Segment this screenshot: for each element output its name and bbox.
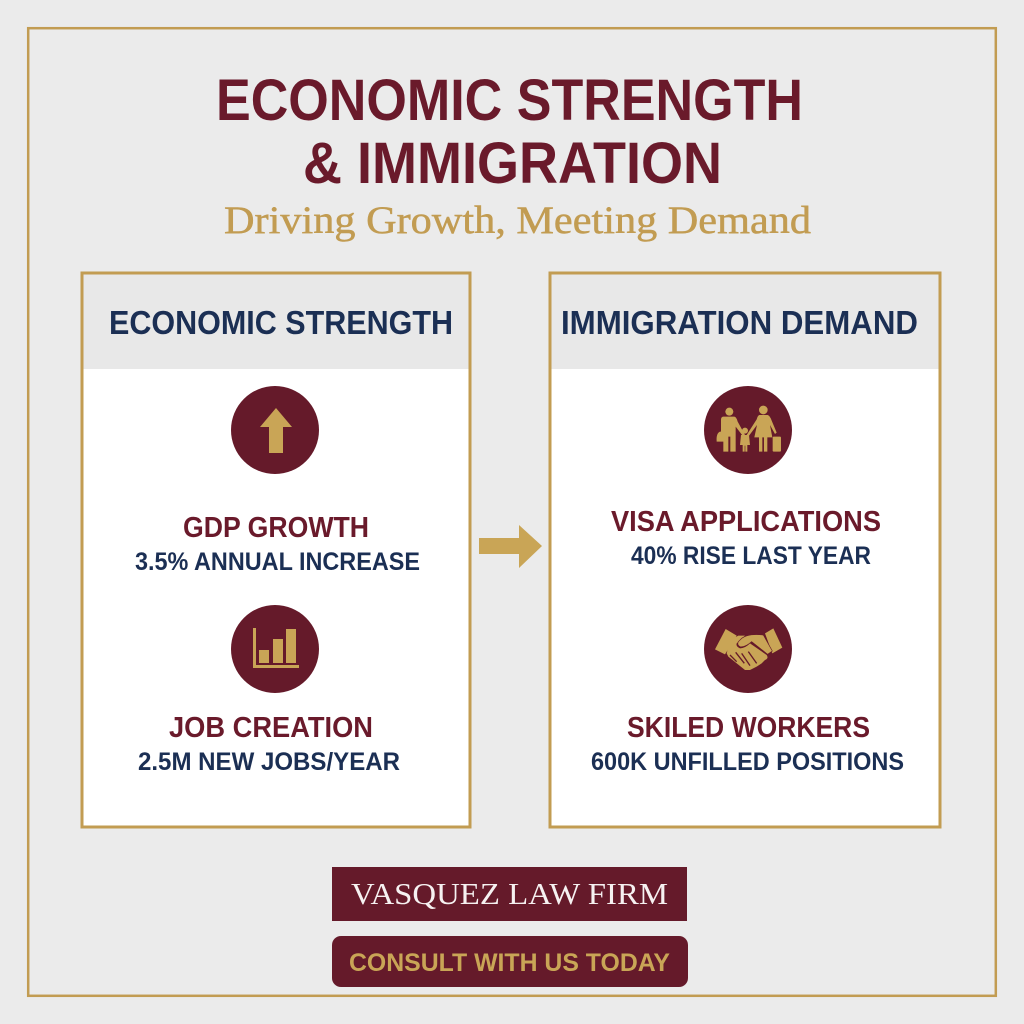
icon: family with luggage <box>704 386 792 474</box>
icon: bar chart <box>231 605 319 693</box>
skilled workers value: 600K UNFILLED POSITIONS <box>591 748 904 776</box>
panel: economic strength <box>82 273 470 827</box>
job creation value: 2.5M NEW JOBS/YEAR <box>138 748 400 776</box>
visa applications value: 40% RISE LAST YEAR <box>631 542 871 570</box>
firm name banner: VASQUEZ LAW FIRM <box>351 876 668 911</box>
skilled workers label: SKILED WORKERS <box>627 712 870 744</box>
title: & IMMIGRATION <box>303 131 722 196</box>
title: ECONOMIC STRENGTH <box>216 68 803 133</box>
visa applications label: VISA APPLICATIONS <box>611 506 881 538</box>
job creation label: JOB CREATION <box>169 712 373 744</box>
icon: up arrow <box>231 386 319 474</box>
icon: handshake <box>704 605 792 693</box>
arrow: economic strength to immigration demand <box>479 525 542 568</box>
panel heading: immigration demand: IMMIGRATION DEMAND <box>561 304 918 341</box>
firm name banner <box>332 867 687 921</box>
GDP growth label: GDP GROWTH <box>183 512 369 544</box>
call to action button <box>332 936 688 987</box>
title <box>216 68 803 196</box>
call to action button: CONSULT WITH US TODAY <box>349 949 670 977</box>
panel heading: economic strength: ECONOMIC STRENGTH <box>109 304 453 341</box>
panel: immigration demand <box>550 273 940 827</box>
GDP growth value: 3.5% ANNUAL INCREASE <box>135 548 420 576</box>
subtitle: Driving Growth, Meeting Demand <box>224 199 812 242</box>
